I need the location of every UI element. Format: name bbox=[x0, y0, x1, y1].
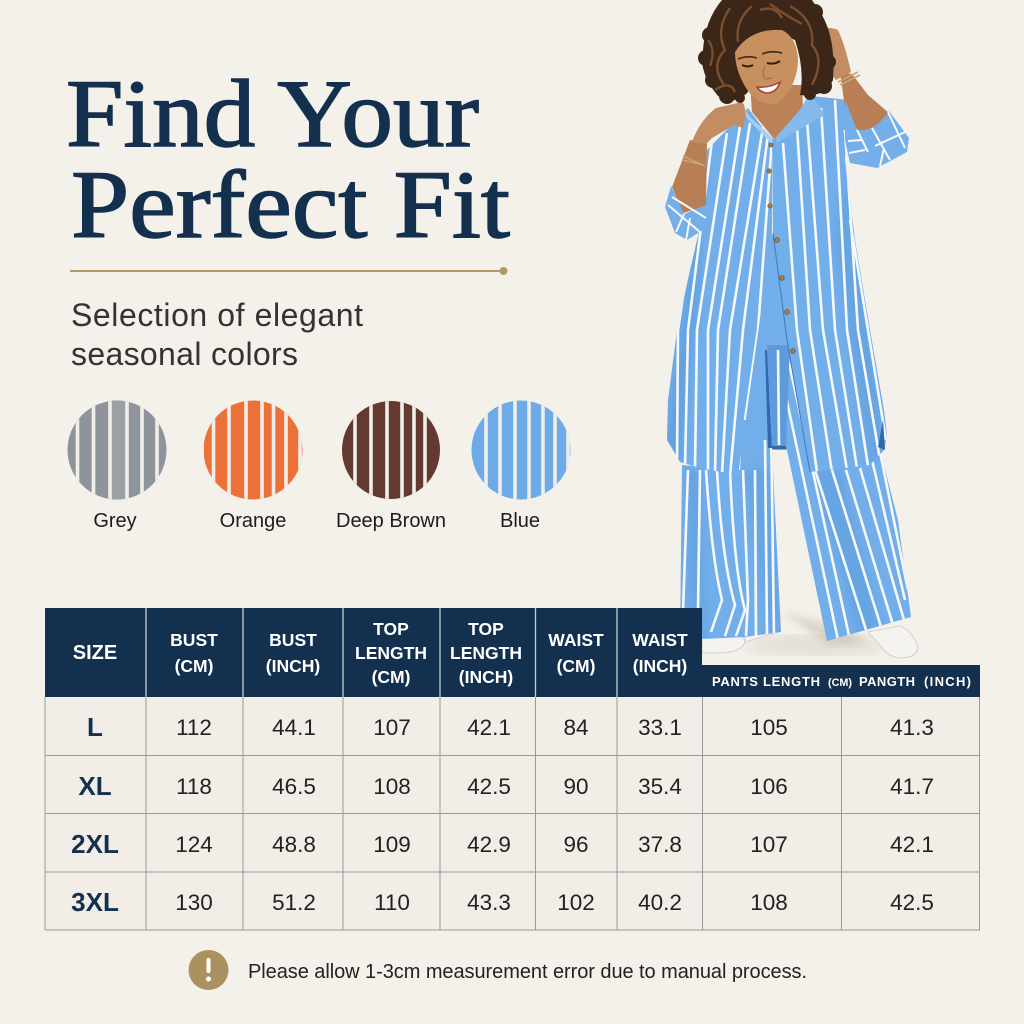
table header: SIZE bbox=[73, 642, 117, 664]
title: Find Your bbox=[66, 60, 479, 167]
table header: (CM) bbox=[175, 656, 213, 676]
icon: exclamation bbox=[188, 950, 228, 990]
icon: right shoe bbox=[868, 626, 918, 658]
subtitle: seasonal colors bbox=[71, 336, 298, 372]
ground shadow bbox=[745, 636, 885, 654]
left arm bbox=[672, 140, 707, 213]
placket edge bbox=[773, 233, 810, 472]
swatch: grey: Grey bbox=[93, 510, 137, 532]
shirt left front panel bbox=[667, 108, 772, 474]
row: XL: 108 bbox=[373, 774, 411, 799]
table header: (INCH) bbox=[924, 674, 971, 689]
left rolled sleeve bbox=[665, 186, 712, 240]
row: L: 84 bbox=[563, 715, 589, 740]
row: XL bbox=[78, 771, 934, 801]
row: 2XL: 124 bbox=[175, 832, 213, 857]
table header: (CM) bbox=[828, 677, 852, 689]
table header: (CM) bbox=[557, 656, 595, 676]
row: 2XL: 48.8 bbox=[272, 832, 316, 857]
row: 3XL: 40.2 bbox=[638, 890, 682, 915]
row: L: 42.1 bbox=[467, 715, 511, 740]
collar bbox=[743, 93, 825, 143]
subtitle: Selection of elegant bbox=[71, 297, 363, 333]
hair bbox=[698, 0, 836, 104]
table header: (INCH) bbox=[459, 667, 513, 687]
inner shirt panel in shadow bbox=[765, 345, 790, 449]
title: Perfect Fit bbox=[71, 151, 510, 258]
row: 3XL: 43.3 bbox=[467, 890, 511, 915]
table body bbox=[45, 697, 980, 930]
row: 2XL: 107 bbox=[750, 832, 788, 857]
swatch: blue bbox=[471, 400, 571, 532]
table header: LENGTH bbox=[450, 643, 522, 663]
swatch: grey bbox=[67, 400, 167, 532]
table header: BUST bbox=[170, 630, 218, 650]
colour swatches bbox=[67, 400, 571, 532]
row: 3XL: 108 bbox=[750, 890, 788, 915]
right rolled sleeve bbox=[845, 100, 909, 168]
row: XL: 90 bbox=[563, 774, 589, 799]
row: 3XL: 110 bbox=[374, 890, 410, 915]
row: XL: 42.5 bbox=[467, 774, 511, 799]
row: 3XL: 130 bbox=[175, 890, 213, 915]
row: L: L bbox=[87, 712, 103, 742]
row: XL: 46.5 bbox=[272, 774, 316, 799]
bracelet right bbox=[838, 72, 860, 85]
table header: WAIST bbox=[632, 630, 688, 650]
row: 3XL: 42.5 bbox=[890, 890, 934, 915]
icon: left shoe bbox=[702, 626, 778, 653]
row: 3XL bbox=[71, 887, 934, 917]
face bbox=[735, 30, 798, 104]
row: L: 33.1 bbox=[638, 715, 682, 740]
row: 2XL bbox=[71, 829, 934, 859]
table header: (INCH) bbox=[266, 656, 320, 676]
row: XL: 41.7 bbox=[890, 774, 934, 799]
shirt right front panel bbox=[772, 96, 887, 472]
row: XL: 106 bbox=[750, 774, 788, 799]
row: L: 41.3 bbox=[890, 715, 934, 740]
table header: BUST bbox=[269, 630, 317, 650]
title divider bbox=[70, 267, 508, 275]
left hand bbox=[692, 102, 745, 144]
size table bbox=[45, 608, 980, 930]
row: 3XL: 3XL bbox=[71, 887, 119, 917]
row: L: 112 bbox=[176, 715, 212, 740]
bracelet left bbox=[682, 156, 705, 166]
footnote: Please allow 1-3cm measurement error due to manual process. bbox=[248, 961, 807, 983]
table header: TOP bbox=[373, 619, 409, 639]
title bbox=[66, 60, 510, 258]
table header: LENGTH bbox=[355, 643, 427, 663]
row: XL: XL bbox=[78, 771, 112, 801]
subtitle bbox=[71, 297, 363, 372]
row: 2XL: 96 bbox=[563, 832, 589, 857]
shirt side vent bbox=[878, 420, 885, 450]
row: L: 105 bbox=[750, 715, 788, 740]
row: L: 44.1 bbox=[272, 715, 316, 740]
swatch: deep brown bbox=[336, 400, 446, 532]
table header: TOP bbox=[468, 619, 504, 639]
table header: (CM) bbox=[372, 667, 410, 687]
right hand bbox=[815, 28, 851, 80]
row: 2XL: 42.9 bbox=[467, 832, 511, 857]
row: XL: 118 bbox=[176, 774, 212, 799]
row: 2XL: 42.1 bbox=[890, 832, 934, 857]
swatch: deep brown: Deep Brown bbox=[336, 510, 446, 532]
row: 3XL: 102 bbox=[557, 890, 595, 915]
model photo illustration bbox=[660, 0, 920, 658]
row: XL: 35.4 bbox=[638, 774, 682, 799]
row: 2XL: 37.8 bbox=[638, 832, 682, 857]
table header: PANGTH bbox=[859, 674, 915, 689]
row: 3XL: 51.2 bbox=[272, 890, 316, 915]
swatch: orange bbox=[204, 400, 304, 532]
swatch: blue: Blue bbox=[500, 510, 540, 532]
table header: WAIST bbox=[548, 630, 604, 650]
neck and chest bbox=[750, 85, 803, 140]
right arm bbox=[840, 72, 889, 131]
row: 2XL: 2XL bbox=[71, 829, 119, 859]
table header: (INCH) bbox=[633, 656, 687, 676]
swatch: orange: Orange bbox=[220, 510, 286, 532]
row: 2XL: 109 bbox=[373, 832, 411, 857]
row: L: 107 bbox=[373, 715, 411, 740]
table header: PANTS LENGTH bbox=[712, 674, 820, 689]
buttons bbox=[767, 143, 795, 353]
row: L bbox=[87, 712, 934, 742]
table header bbox=[45, 608, 980, 697]
wide-leg pants bbox=[680, 235, 911, 641]
